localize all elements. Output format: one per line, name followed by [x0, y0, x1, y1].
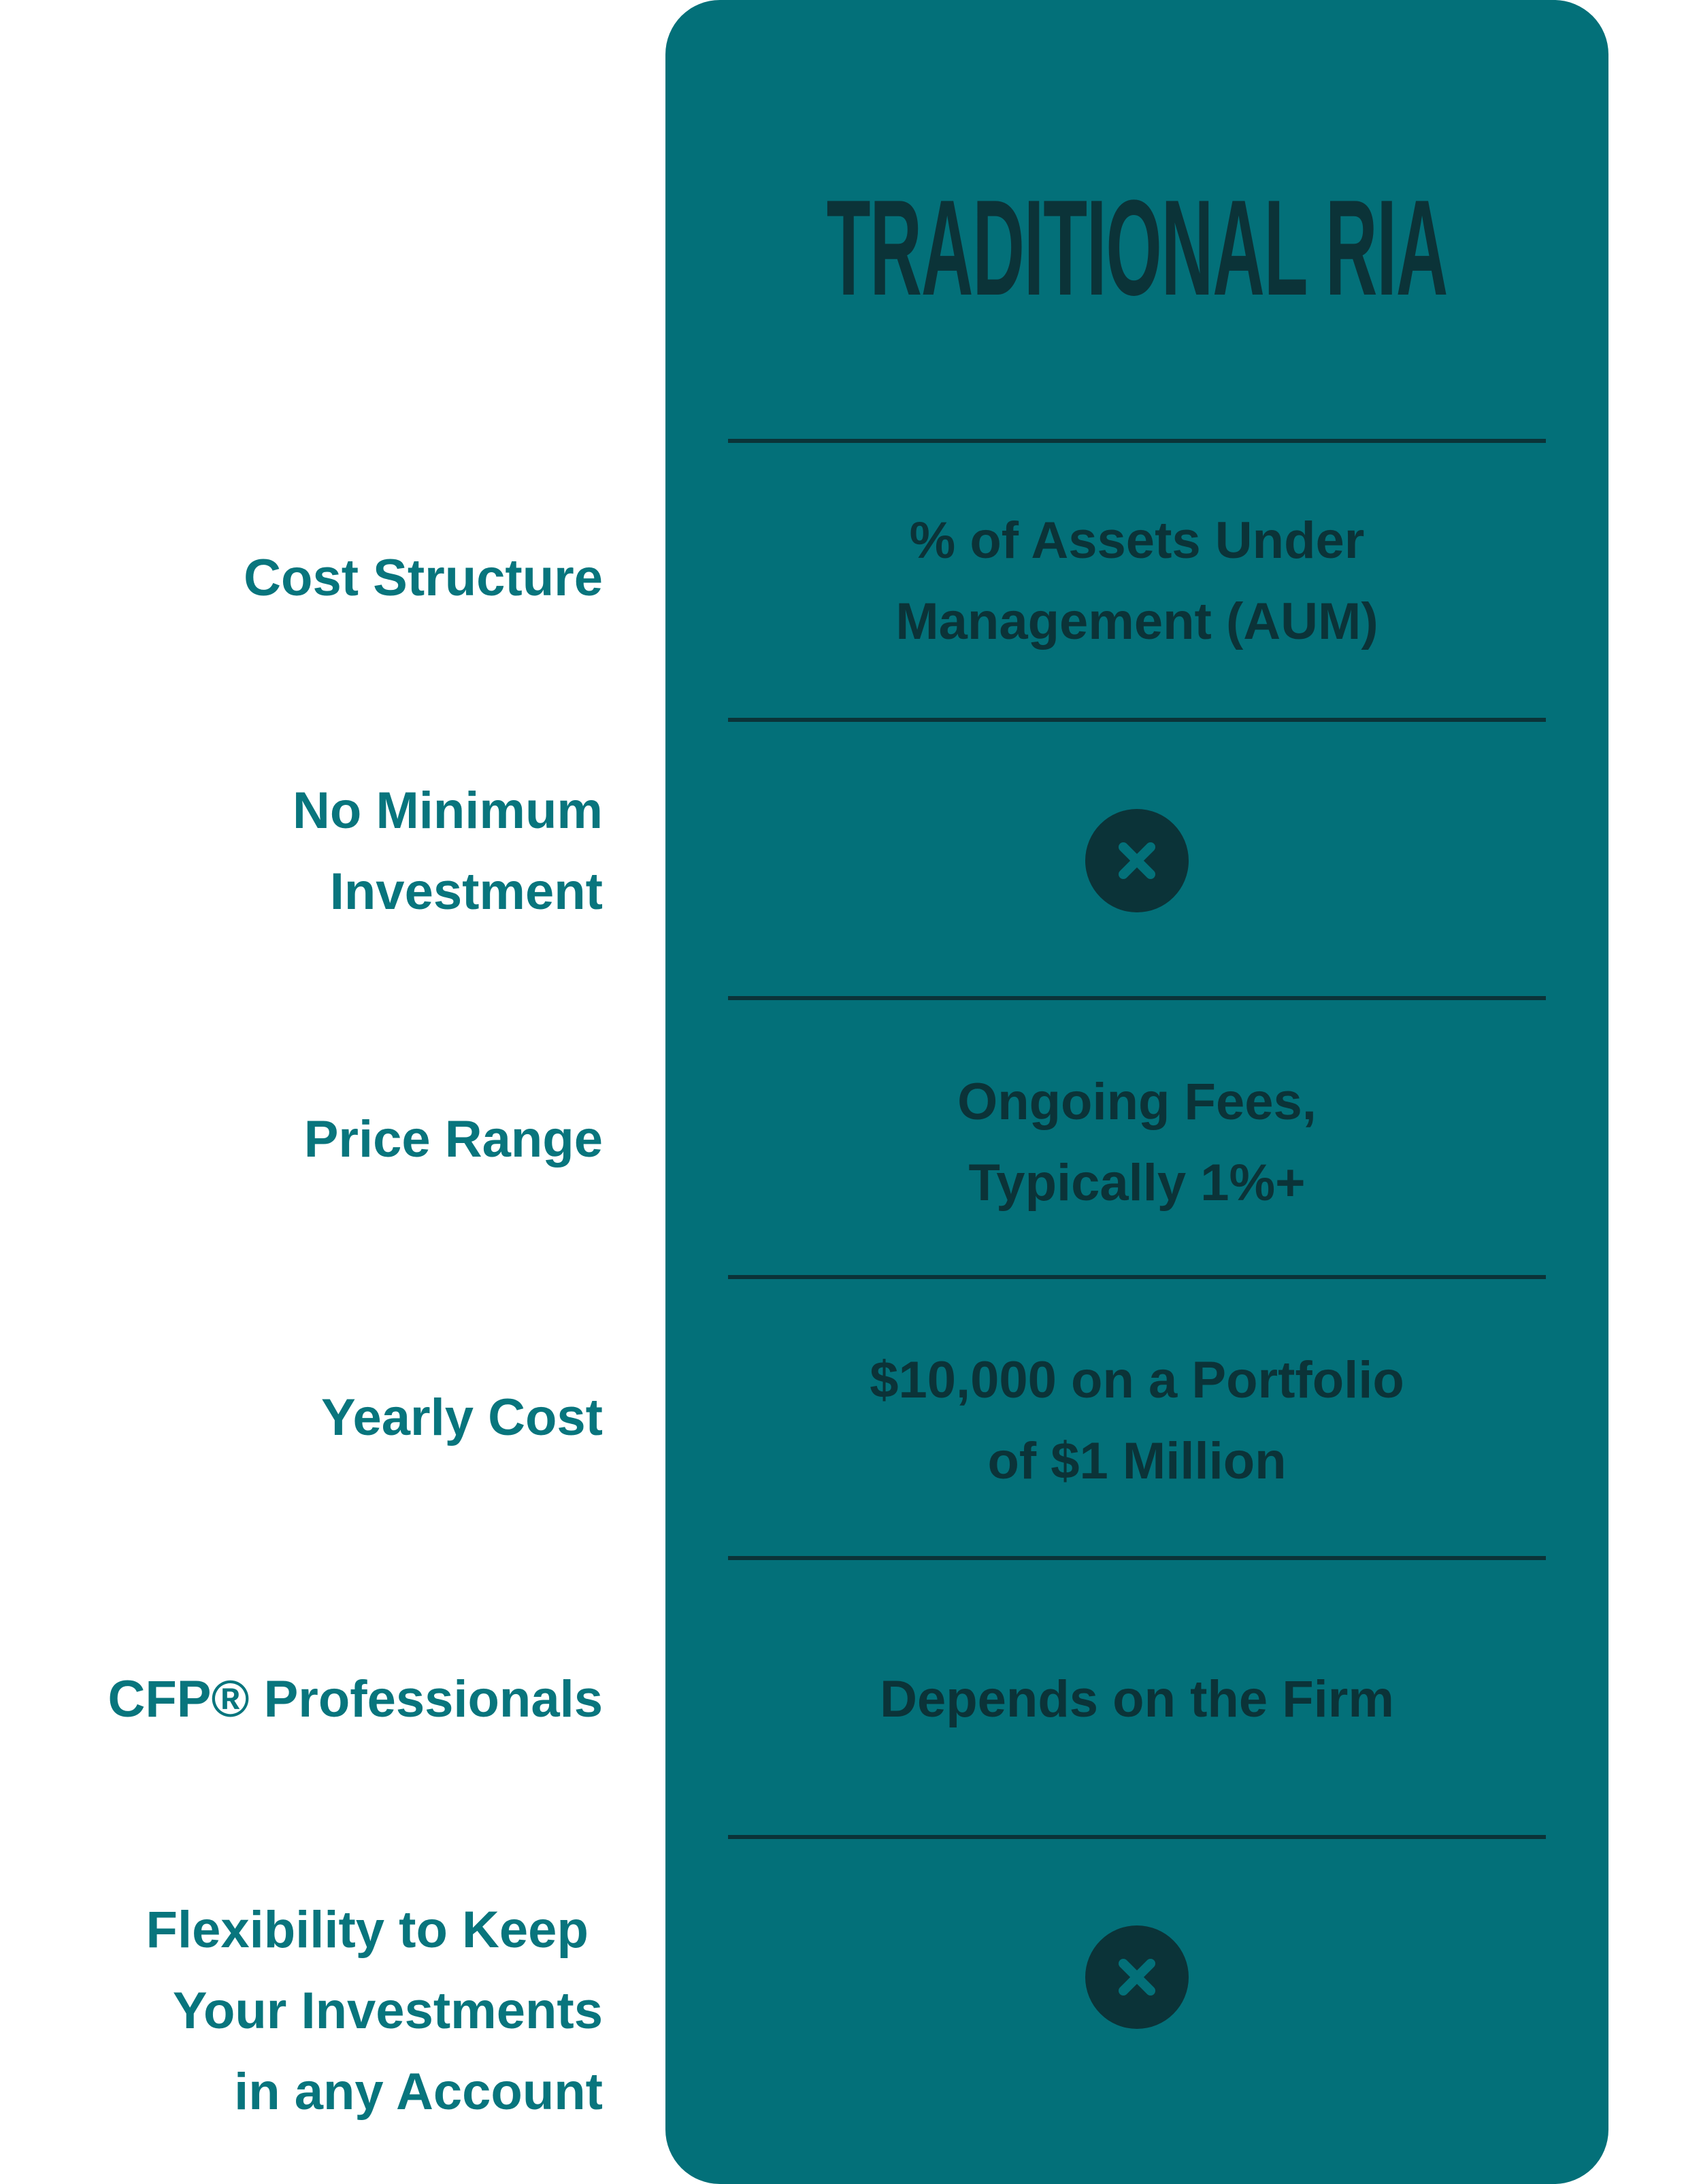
cell: price range — [957, 1073, 1317, 1212]
label: CFP: CFP® Professionals — [108, 1670, 603, 1728]
cell: CFP: Depends on the Firm — [880, 1670, 1394, 1728]
label: cost structure: Cost Structure — [244, 549, 603, 607]
label: no minimum — [293, 782, 603, 921]
panel: traditional RIA — [665, 0, 1608, 2184]
cell: yearly cost: of $1 Million — [987, 1432, 1287, 1490]
cell: price range: Ongoing Fees, — [957, 1073, 1317, 1131]
label: no minimum: No Minimum — [293, 782, 603, 840]
label: flexibility — [146, 1901, 603, 2121]
label: flexibility: in any Account — [234, 2063, 603, 2121]
label: flexibility: Your Investments — [173, 1982, 603, 2040]
label: flexibility: Flexibility to Keep — [146, 1901, 589, 1959]
label: price range: Price Range — [304, 1110, 603, 1168]
cell: yearly cost: $10,000 on a Portfolio — [870, 1351, 1404, 1409]
cell: cost structure: % of Assets Under — [910, 512, 1364, 569]
icon: x circle — [1085, 1925, 1189, 2029]
icon: x circle — [1085, 809, 1189, 912]
cell: price range: Typically 1%+ — [969, 1154, 1305, 1212]
label: no minimum: Investment — [330, 863, 603, 921]
label: yearly cost: Yearly Cost — [321, 1389, 603, 1446]
cell: cost structure — [895, 512, 1378, 650]
cell: yearly cost — [870, 1351, 1404, 1490]
cell: cost structure: Management (AUM) — [895, 593, 1378, 650]
title: TRADITIONAL RIA — [827, 172, 1447, 324]
